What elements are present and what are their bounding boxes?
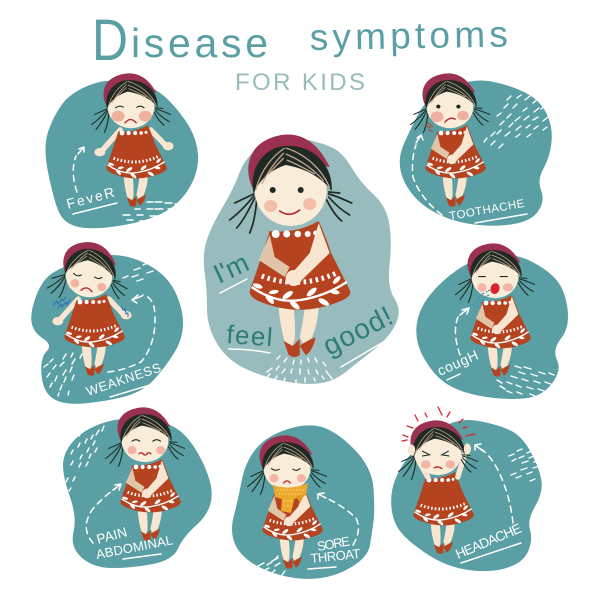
arrow [481, 449, 513, 523]
girl: abdominal pain [105, 407, 185, 541]
icon: shiver marks [53, 297, 128, 317]
blob: headache [391, 420, 542, 571]
girl: weakness [46, 237, 133, 376]
flecks [44, 263, 153, 396]
label: headache: HEADACHE [453, 521, 524, 562]
blob: feel good [204, 138, 399, 384]
blob: fever [46, 80, 198, 228]
title: symptoms [309, 14, 508, 58]
subtitle: FOR KIDS [235, 69, 365, 96]
icon: cough spray [473, 290, 490, 308]
girl: toothache [410, 73, 490, 207]
text: feel: feel [226, 319, 274, 352]
label: cough: cougH [435, 347, 481, 379]
panel: sore throat [232, 425, 374, 579]
panel: toothache [400, 73, 552, 226]
label: weakness: WEAKNESS [84, 360, 163, 399]
icon: pain rays [402, 407, 475, 441]
girl: cough [455, 243, 535, 377]
label: pain: PAIN [95, 524, 129, 547]
arrow [108, 295, 155, 372]
girl: fever [91, 73, 174, 207]
panel: weakness [31, 237, 183, 404]
blob: weakness [31, 255, 183, 404]
panel: headache [391, 407, 542, 571]
panel: cough [416, 243, 568, 399]
blob: toothache [400, 81, 552, 226]
text: I'm: I'm [209, 247, 253, 289]
flecks [484, 95, 548, 148]
girl: sore throat [247, 435, 327, 569]
blob: abdominal pain [63, 418, 212, 568]
flecks [497, 366, 554, 396]
arrow [86, 488, 116, 543]
title [92, 8, 508, 73]
title: D [92, 8, 128, 73]
title: isease [131, 20, 268, 66]
label: toothache: TOOTHACHE [448, 198, 526, 223]
flecks [123, 202, 182, 221]
girl: headache [398, 420, 478, 554]
panel: feel good [204, 135, 399, 384]
flecks [258, 556, 285, 575]
arrow [324, 497, 358, 545]
blob: sore throat [232, 425, 374, 579]
icon: scarf [273, 483, 308, 513]
arrow [455, 317, 460, 355]
label: fever: FeveR [65, 184, 116, 212]
girl: happy [230, 135, 352, 357]
ground flecks [267, 356, 332, 383]
icon: pain marks [425, 122, 433, 132]
blob: cough [416, 255, 568, 399]
text: good!: good! [318, 300, 398, 361]
label: abdominal: ABDOMINAL [95, 532, 174, 562]
flecks [509, 443, 537, 481]
panel: abdominal pain [60, 407, 212, 568]
arrow [412, 145, 442, 215]
panel: fever [46, 73, 198, 228]
label: sore: SORE [316, 533, 351, 554]
arrow [73, 156, 77, 192]
flecks [60, 426, 104, 500]
label: throat: THROAT [310, 546, 361, 566]
